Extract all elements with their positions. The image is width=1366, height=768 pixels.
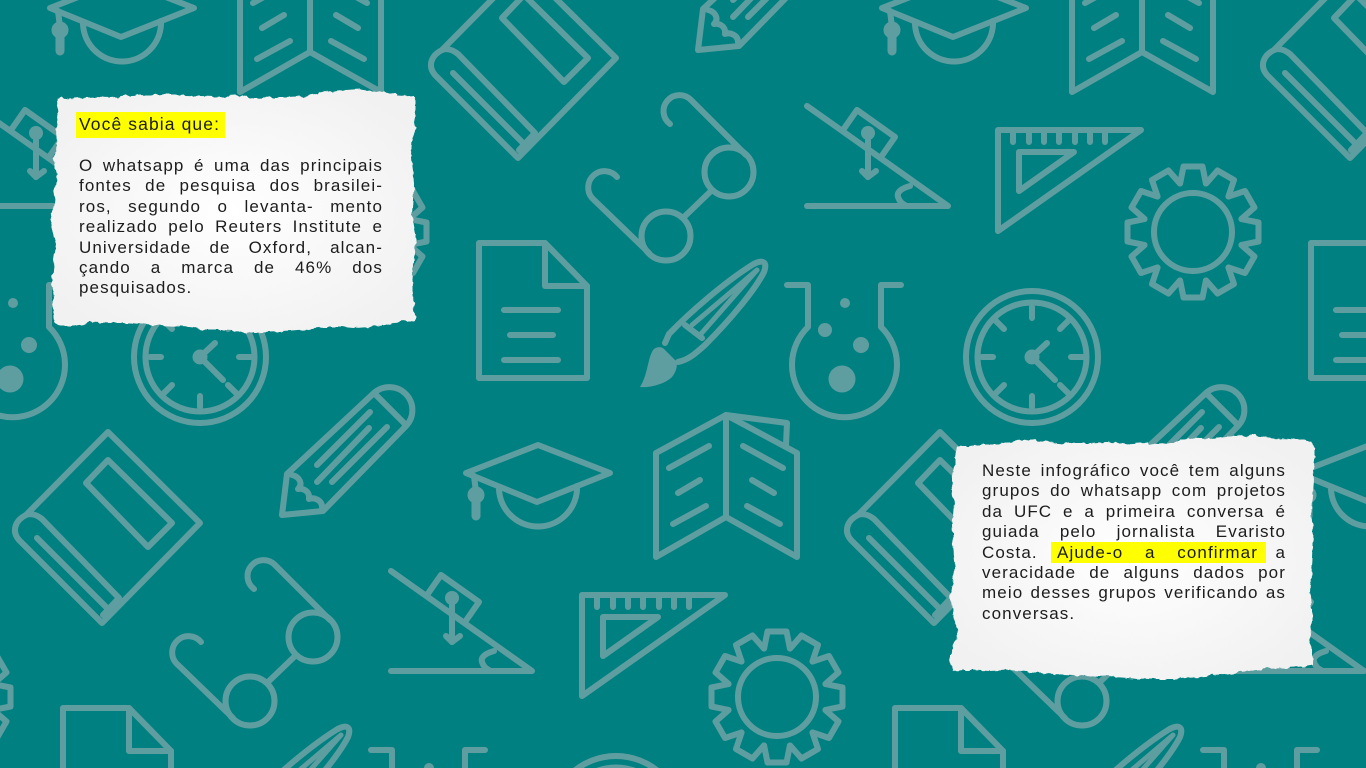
text block: neste infográfico: grupos do whatsapp com projetos bbox=[982, 481, 1286, 500]
panel: neste infográfico bbox=[949, 434, 1316, 680]
text block: neste infográfico: Ajude-o a confirmar bbox=[1057, 543, 1258, 562]
text block: neste infográfico: veracidade de alguns dados por bbox=[982, 563, 1286, 582]
panel: você sabia que bbox=[50, 88, 417, 334]
text block: neste infográfico: guiada pelo jornalista Evaristo bbox=[982, 522, 1286, 541]
text block: neste infográfico: Neste infográfico você tem alguns bbox=[982, 461, 1286, 480]
text block: neste infográfico: da UFC e a primeira conversa é bbox=[982, 502, 1286, 521]
text block: whatsapp: Universidade de Oxford, alcan- bbox=[79, 238, 383, 257]
text block: whatsapp: realizado pelo Reuters Institute e bbox=[79, 217, 383, 236]
text block: whatsapp bbox=[79, 156, 383, 297]
text block: neste infográfico: a bbox=[1275, 543, 1286, 562]
text block: whatsapp: O whatsapp é uma das principais bbox=[79, 156, 383, 175]
text block: neste infográfico: Costa. bbox=[982, 543, 1038, 562]
heading highlight: você sabia que bbox=[76, 112, 225, 138]
text block: neste infográfico: conversas. bbox=[982, 604, 1075, 623]
text block: whatsapp: çando a marca de 46% dos bbox=[79, 258, 383, 277]
text block: whatsapp: pesquisados. bbox=[79, 278, 192, 297]
text block: neste infográfico bbox=[982, 461, 1286, 623]
text block: whatsapp: ros, segundo o levanta- mento bbox=[79, 197, 383, 216]
text block: neste infográfico: meio desses grupos verificando as bbox=[982, 583, 1286, 602]
text block: whatsapp: fontes de pesquisa dos brasilei- bbox=[79, 176, 383, 195]
highlight: ajude-o a confirmar bbox=[1051, 542, 1266, 563]
heading text: Você sabia que: bbox=[79, 114, 220, 134]
